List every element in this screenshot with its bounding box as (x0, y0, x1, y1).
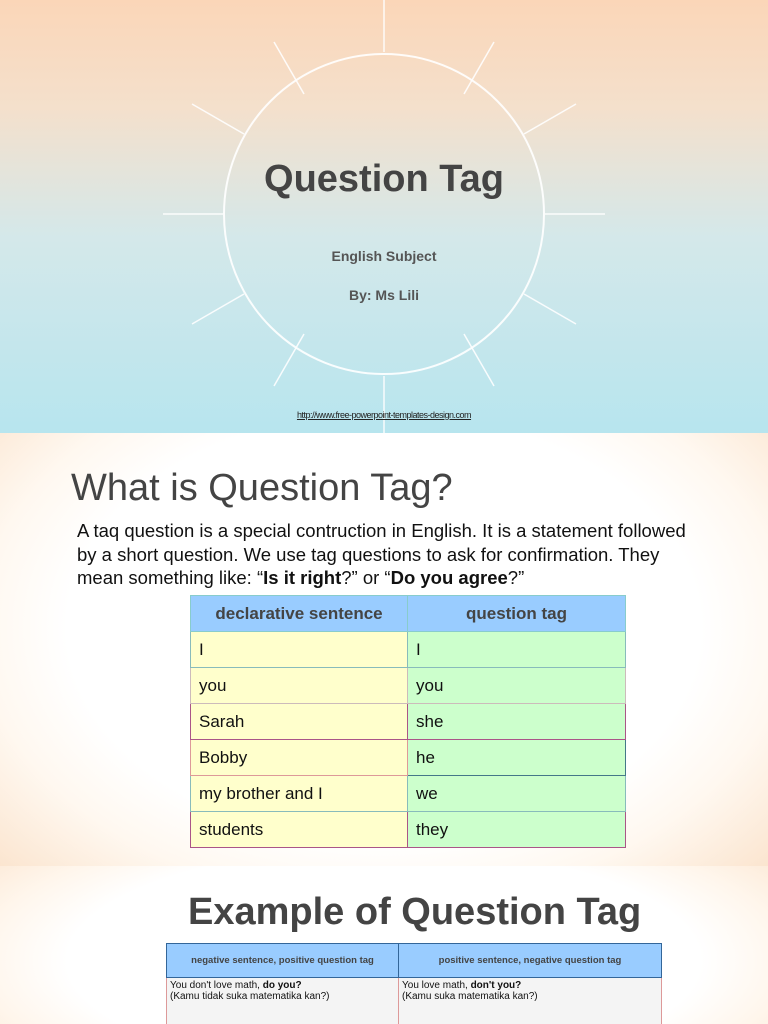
table: pronoun mapping: Bobby (199, 748, 247, 766)
heading: What is Question Tag? (71, 467, 453, 509)
table: pronoun mapping: Sarah (199, 712, 244, 730)
table: pronoun mapping: I (199, 640, 204, 658)
table: pronoun mapping: they (416, 820, 448, 838)
table: examples: You love math, don't you? (402, 980, 521, 991)
table: pronoun mapping (190, 595, 626, 848)
table: pronoun mapping: you (199, 676, 226, 694)
table: pronoun mapping: declarative sentence (215, 604, 383, 622)
heading: Example of Question Tag (188, 891, 641, 933)
table: examples: You don't love math, do you? (170, 980, 302, 991)
title: Question Tag (264, 158, 504, 200)
table: pronoun mapping: I (416, 640, 421, 658)
table: examples: positive sentence, negative question tag (439, 955, 621, 966)
table: examples: (Kamu tidak suka matematika kan?) (170, 991, 330, 1002)
table: pronoun mapping: you (416, 676, 443, 694)
subtitle: English Subject (331, 248, 436, 264)
url: http://www.free-powerpoint-templates-design.com (297, 410, 471, 420)
paragraph: A taq question is a special contruction in English. It is a statement followed by a short question. We use tag questions to ask for confirmation. They mean something like: “Is it right?” or “Do you agree?” (77, 520, 686, 588)
table: examples: negative sentence, positive question tag (191, 955, 374, 966)
slide 1: title (0, 0, 768, 433)
author: By: Ms Lili (349, 287, 419, 303)
table: pronoun mapping: we (416, 784, 438, 802)
table: pronoun mapping: he (416, 748, 435, 766)
table: pronoun mapping: my brother and I (199, 784, 323, 802)
circle decoration with rays (163, 0, 605, 433)
table: pronoun mapping: question tag (466, 604, 567, 622)
table: pronoun mapping: she (416, 712, 443, 730)
slide 2: what is question tag (0, 433, 768, 866)
table: examples: (Kamu suka matematika kan?) (402, 991, 538, 1002)
table: pronoun mapping: students (199, 820, 263, 838)
slide 3: examples (0, 866, 768, 1024)
table: examples (166, 943, 662, 1024)
